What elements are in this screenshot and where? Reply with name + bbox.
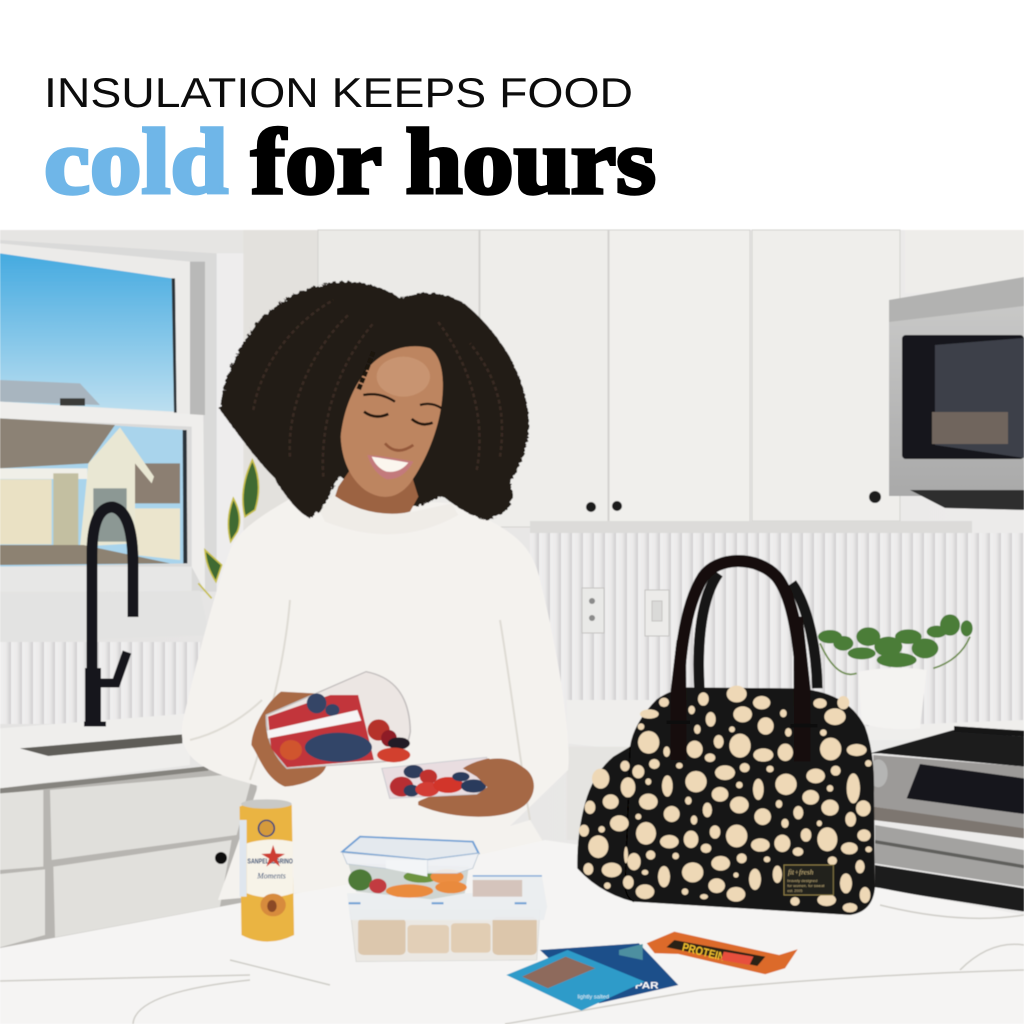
upper cabinets [243, 230, 1024, 535]
kind protein bar [647, 932, 798, 974]
snake plant behind person [198, 460, 259, 598]
bag [577, 561, 875, 915]
heading word: cold: cold [44, 111, 228, 214]
blue snack packs: lightly salted [578, 995, 609, 1000]
blue snack packs [506, 943, 678, 1011]
wrap container [347, 876, 547, 962]
blue snack packs: PAR [635, 981, 659, 991]
sweater [182, 497, 569, 900]
front pocket edge [625, 747, 634, 902]
snack container with carrots [342, 837, 479, 899]
can: SANPELLEGRINO [247, 857, 293, 865]
right counter and cabinet [567, 700, 1024, 840]
bag label: for women, for sweat [787, 883, 825, 888]
left hand holding cup [251, 692, 326, 787]
microwave [889, 277, 1024, 510]
bag body [577, 687, 875, 915]
collar [320, 495, 458, 534]
eyes and brows [363, 394, 442, 424]
bag label: est. 2005 [787, 889, 802, 893]
faucet [84, 507, 133, 725]
window [0, 230, 243, 643]
hair [220, 282, 529, 520]
backsplash [530, 533, 1024, 728]
kind protein bar: PROTEIN [681, 940, 726, 964]
woman [182, 282, 569, 900]
front handle with straps [667, 561, 817, 762]
right hand [418, 759, 534, 817]
face [341, 346, 443, 497]
bag label: fit+fresh [788, 867, 814, 876]
left counter and cabinets [0, 713, 257, 960]
bag label: bravely designed [787, 878, 817, 883]
bag spots [579, 686, 872, 912]
back handle [699, 573, 817, 688]
kitchen photo scene [0, 230, 1024, 1024]
stove [869, 726, 1024, 912]
smile [367, 455, 413, 479]
bag label [784, 865, 833, 895]
neck [335, 470, 418, 515]
sink backsplash [0, 642, 200, 724]
can: Moments [257, 872, 286, 881]
heading words: for hours: for hours [251, 111, 656, 214]
sweater folds [190, 600, 530, 820]
small container with berries [382, 757, 489, 798]
heading line: insulation keeps food: INSULATION KEEPS FOOD [44, 69, 633, 116]
foreground items on zoom-scale coordinates [240, 672, 798, 1011]
potted plant [818, 614, 973, 729]
thumb over container [463, 758, 504, 788]
wall outlets [582, 588, 669, 636]
curl [358, 352, 373, 390]
round clear cup with berries [266, 672, 410, 768]
can [240, 799, 294, 942]
nose [385, 443, 413, 450]
wall background [0, 230, 1024, 1024]
countertop [0, 840, 1024, 1024]
title [0, 0, 1024, 230]
